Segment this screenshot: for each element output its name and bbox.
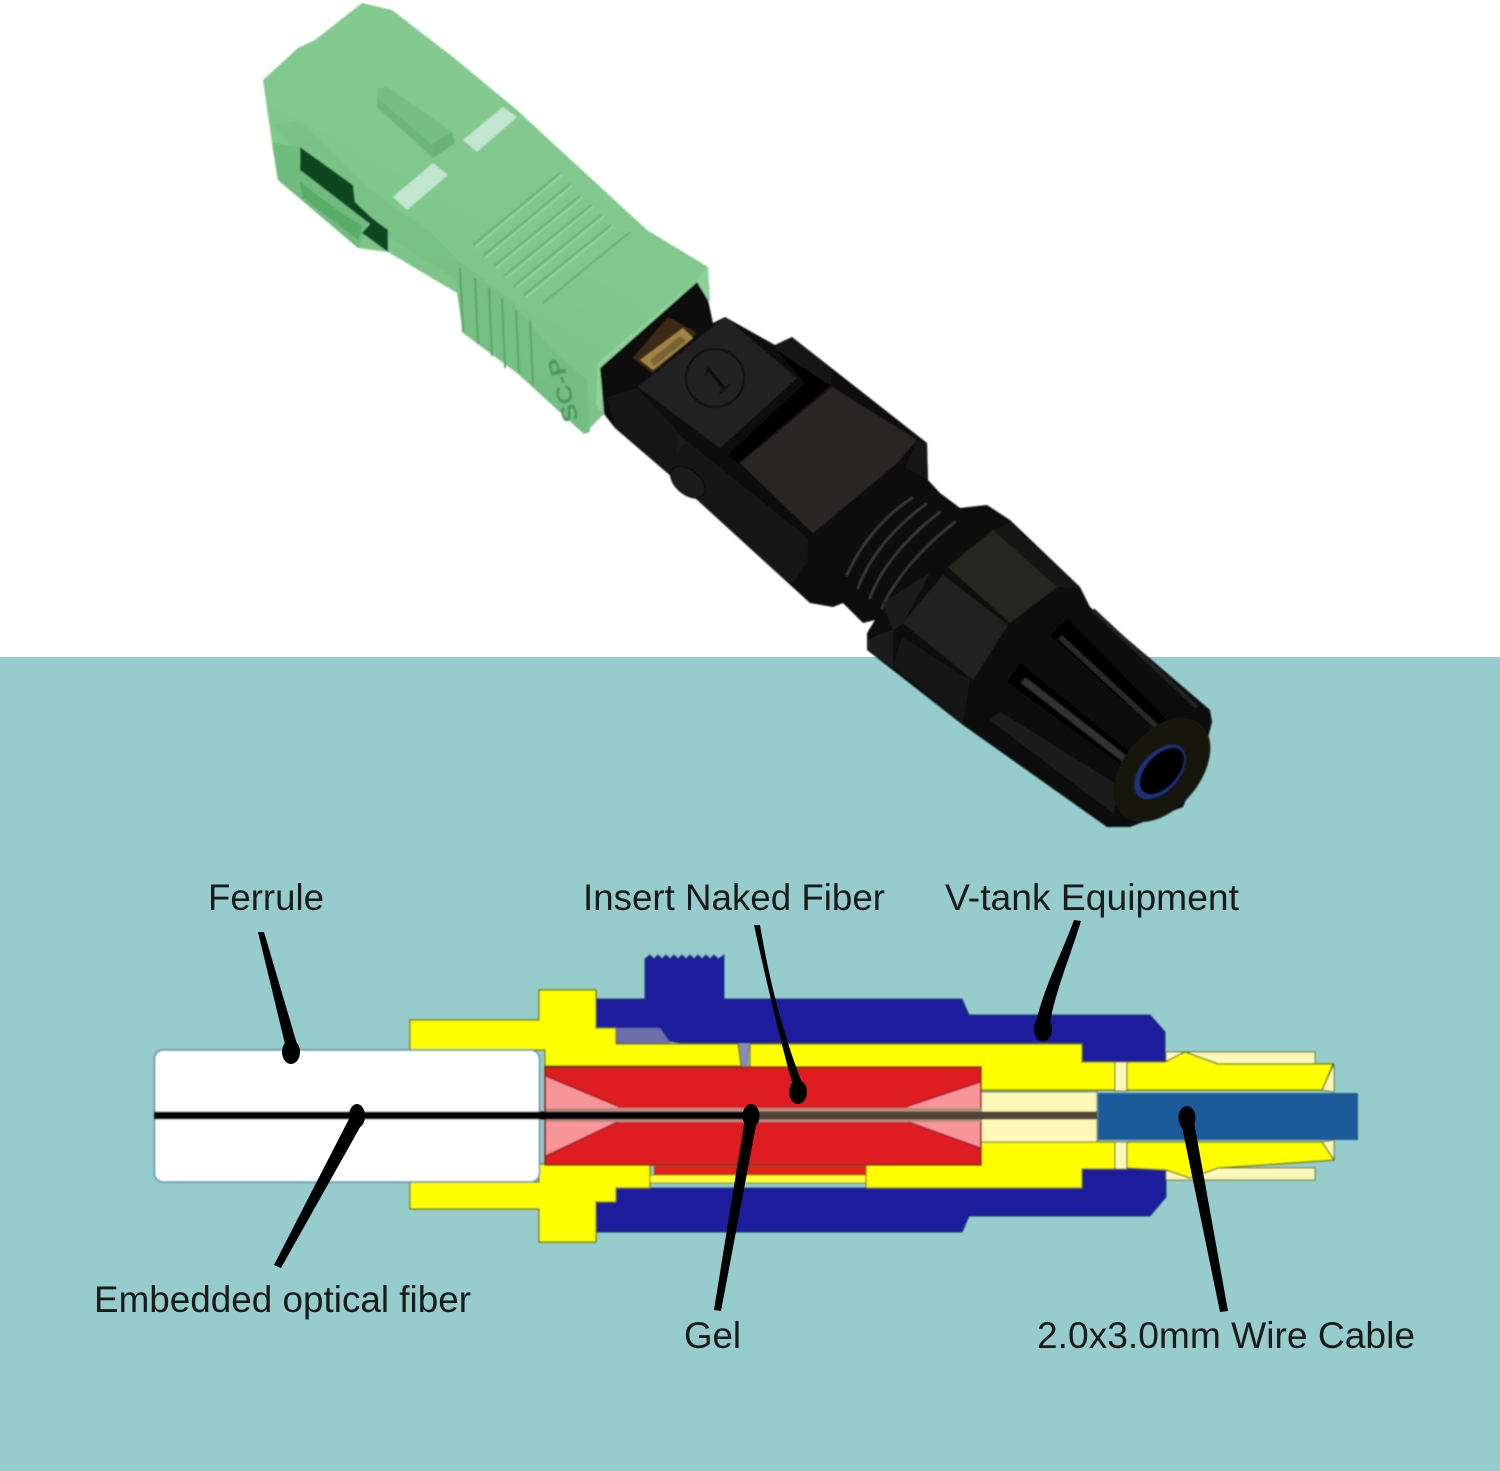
hex nut faces [867, 523, 1080, 723]
raised key tab [377, 87, 455, 158]
main block side face [672, 433, 810, 602]
grip ridges side [460, 268, 533, 386]
main block top face [740, 387, 917, 533]
outer navy housing [596, 955, 1166, 1232]
grey gasket [616, 1028, 671, 1044]
label: Ferrule: Ferrule [208, 877, 324, 918]
photo: SC/APC fast connector [263, 3, 1230, 840]
left body side [607, 388, 677, 477]
label: Gel: Gel [684, 1315, 741, 1356]
leader: 2.0x3.0mm Wire Cable [1178, 1106, 1228, 1312]
leader: Ferrule [258, 932, 300, 1064]
threaded knob [596, 955, 1165, 1062]
cream spacer inserts [981, 1052, 1334, 1180]
cable entry hole [1094, 700, 1230, 840]
grip ridges top [473, 173, 630, 303]
side button [665, 460, 711, 504]
block end face [905, 440, 928, 480]
label: Insert Naked Fiber: Insert Naked Fiber [583, 877, 885, 918]
ribbed end cone [990, 610, 1197, 813]
leader: V-tank Equipment [1034, 920, 1081, 1042]
top cap face with number 1 [638, 317, 797, 448]
green connector housing [263, 3, 710, 434]
gold fiber window [633, 317, 697, 373]
rear yellow crimp sleeve [1127, 1052, 1334, 1178]
embedded optical fiber [154, 1112, 1097, 1120]
screw thread [847, 498, 955, 608]
label: V-tank Equipment: V-tank Equipment [945, 877, 1239, 918]
label: Embedded optical fiber: Embedded optical fiber [94, 1279, 471, 1320]
side latch [272, 143, 368, 248]
blue wire cable [1098, 1093, 1358, 1140]
panel: teal diagram background [0, 657, 1500, 1471]
lower strip [654, 1166, 866, 1175]
white stripes [463, 107, 517, 152]
leader: Insert Naked Fiber [754, 925, 807, 1104]
leader: Embedded optical fiber [274, 1104, 365, 1268]
black connector body [600, 282, 1230, 840]
black slot [728, 350, 830, 463]
red gel chamber [545, 1067, 981, 1165]
yellow body [410, 990, 1115, 1242]
label: 2.0x3.0mm Wire Cable: 2.0x3.0mm Wire Cable [1037, 1315, 1415, 1356]
panel: white photo background [0, 0, 1500, 657]
embossed SC-P label: SC-P [543, 355, 584, 425]
leader: Gel [714, 1104, 760, 1311]
latch ledge [775, 337, 832, 385]
diagram: connector cross-section [154, 955, 1358, 1242]
dark latch slot [300, 147, 388, 252]
white ferrule [154, 1050, 540, 1182]
top cap face with number 1: 1 [693, 355, 739, 404]
